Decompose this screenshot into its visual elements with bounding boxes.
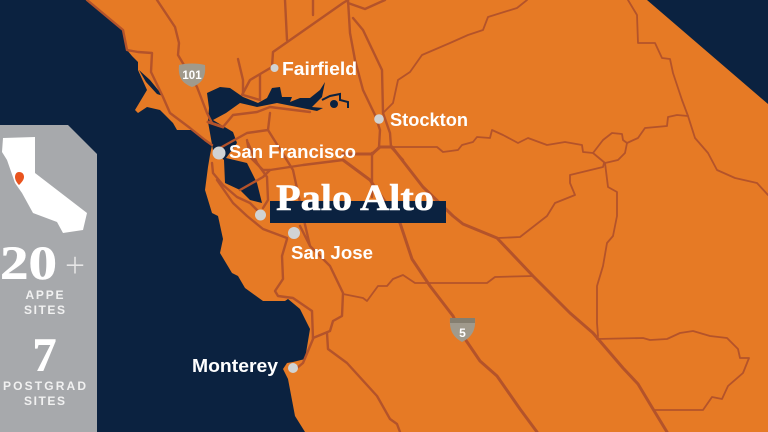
icon: California state (2, 137, 87, 233)
statistic: 20+ APPE sites: 20 (0, 237, 57, 290)
statistic: 7 postgrad sites: 7 (32, 329, 56, 382)
highlight bar behind Palo Alto (270, 201, 446, 223)
city marker: San Francisco (212, 146, 226, 160)
delta pond (330, 100, 338, 108)
city marker: Fairfield (270, 64, 278, 72)
statistic: 20+ APPE sites: + (64, 244, 86, 285)
city label: San Jose: San Jose (291, 243, 373, 263)
statistic: 20+ APPE sites: SITES (24, 303, 65, 317)
city label: Stockton: Stockton (390, 110, 468, 130)
San Francisco bay and delta (207, 82, 325, 203)
panel: statistics sidebar (0, 125, 97, 432)
highway shield: 101 (179, 64, 205, 87)
highway shield: 5: 5 (459, 326, 466, 340)
city marker: Stockton (374, 114, 384, 124)
icon: location pin (15, 172, 24, 185)
city marker: San Jose (288, 227, 300, 239)
highway shield: 101: 101 (182, 70, 202, 82)
Tomales bay (139, 70, 163, 96)
statistic: 20+ APPE sites: APPE (26, 288, 64, 302)
highway shield: 5 (450, 318, 475, 342)
city label: Monterey: Monterey (192, 356, 278, 376)
city label: Palo Alto: Palo Alto (276, 178, 434, 219)
city marker: Monterey (288, 363, 298, 373)
city label: San Francisco: San Francisco (229, 142, 356, 162)
statistic: 7 postgrad sites (3, 329, 86, 408)
statistic: 7 postgrad sites: SITES (24, 394, 65, 408)
city label: Fairfield: Fairfield (282, 59, 357, 79)
statistic: 20+ APPE sites (0, 237, 86, 317)
statistic: 7 postgrad sites: POSTGRAD (3, 379, 86, 393)
delta channel (322, 94, 348, 108)
city marker: Palo Alto (255, 210, 266, 220)
